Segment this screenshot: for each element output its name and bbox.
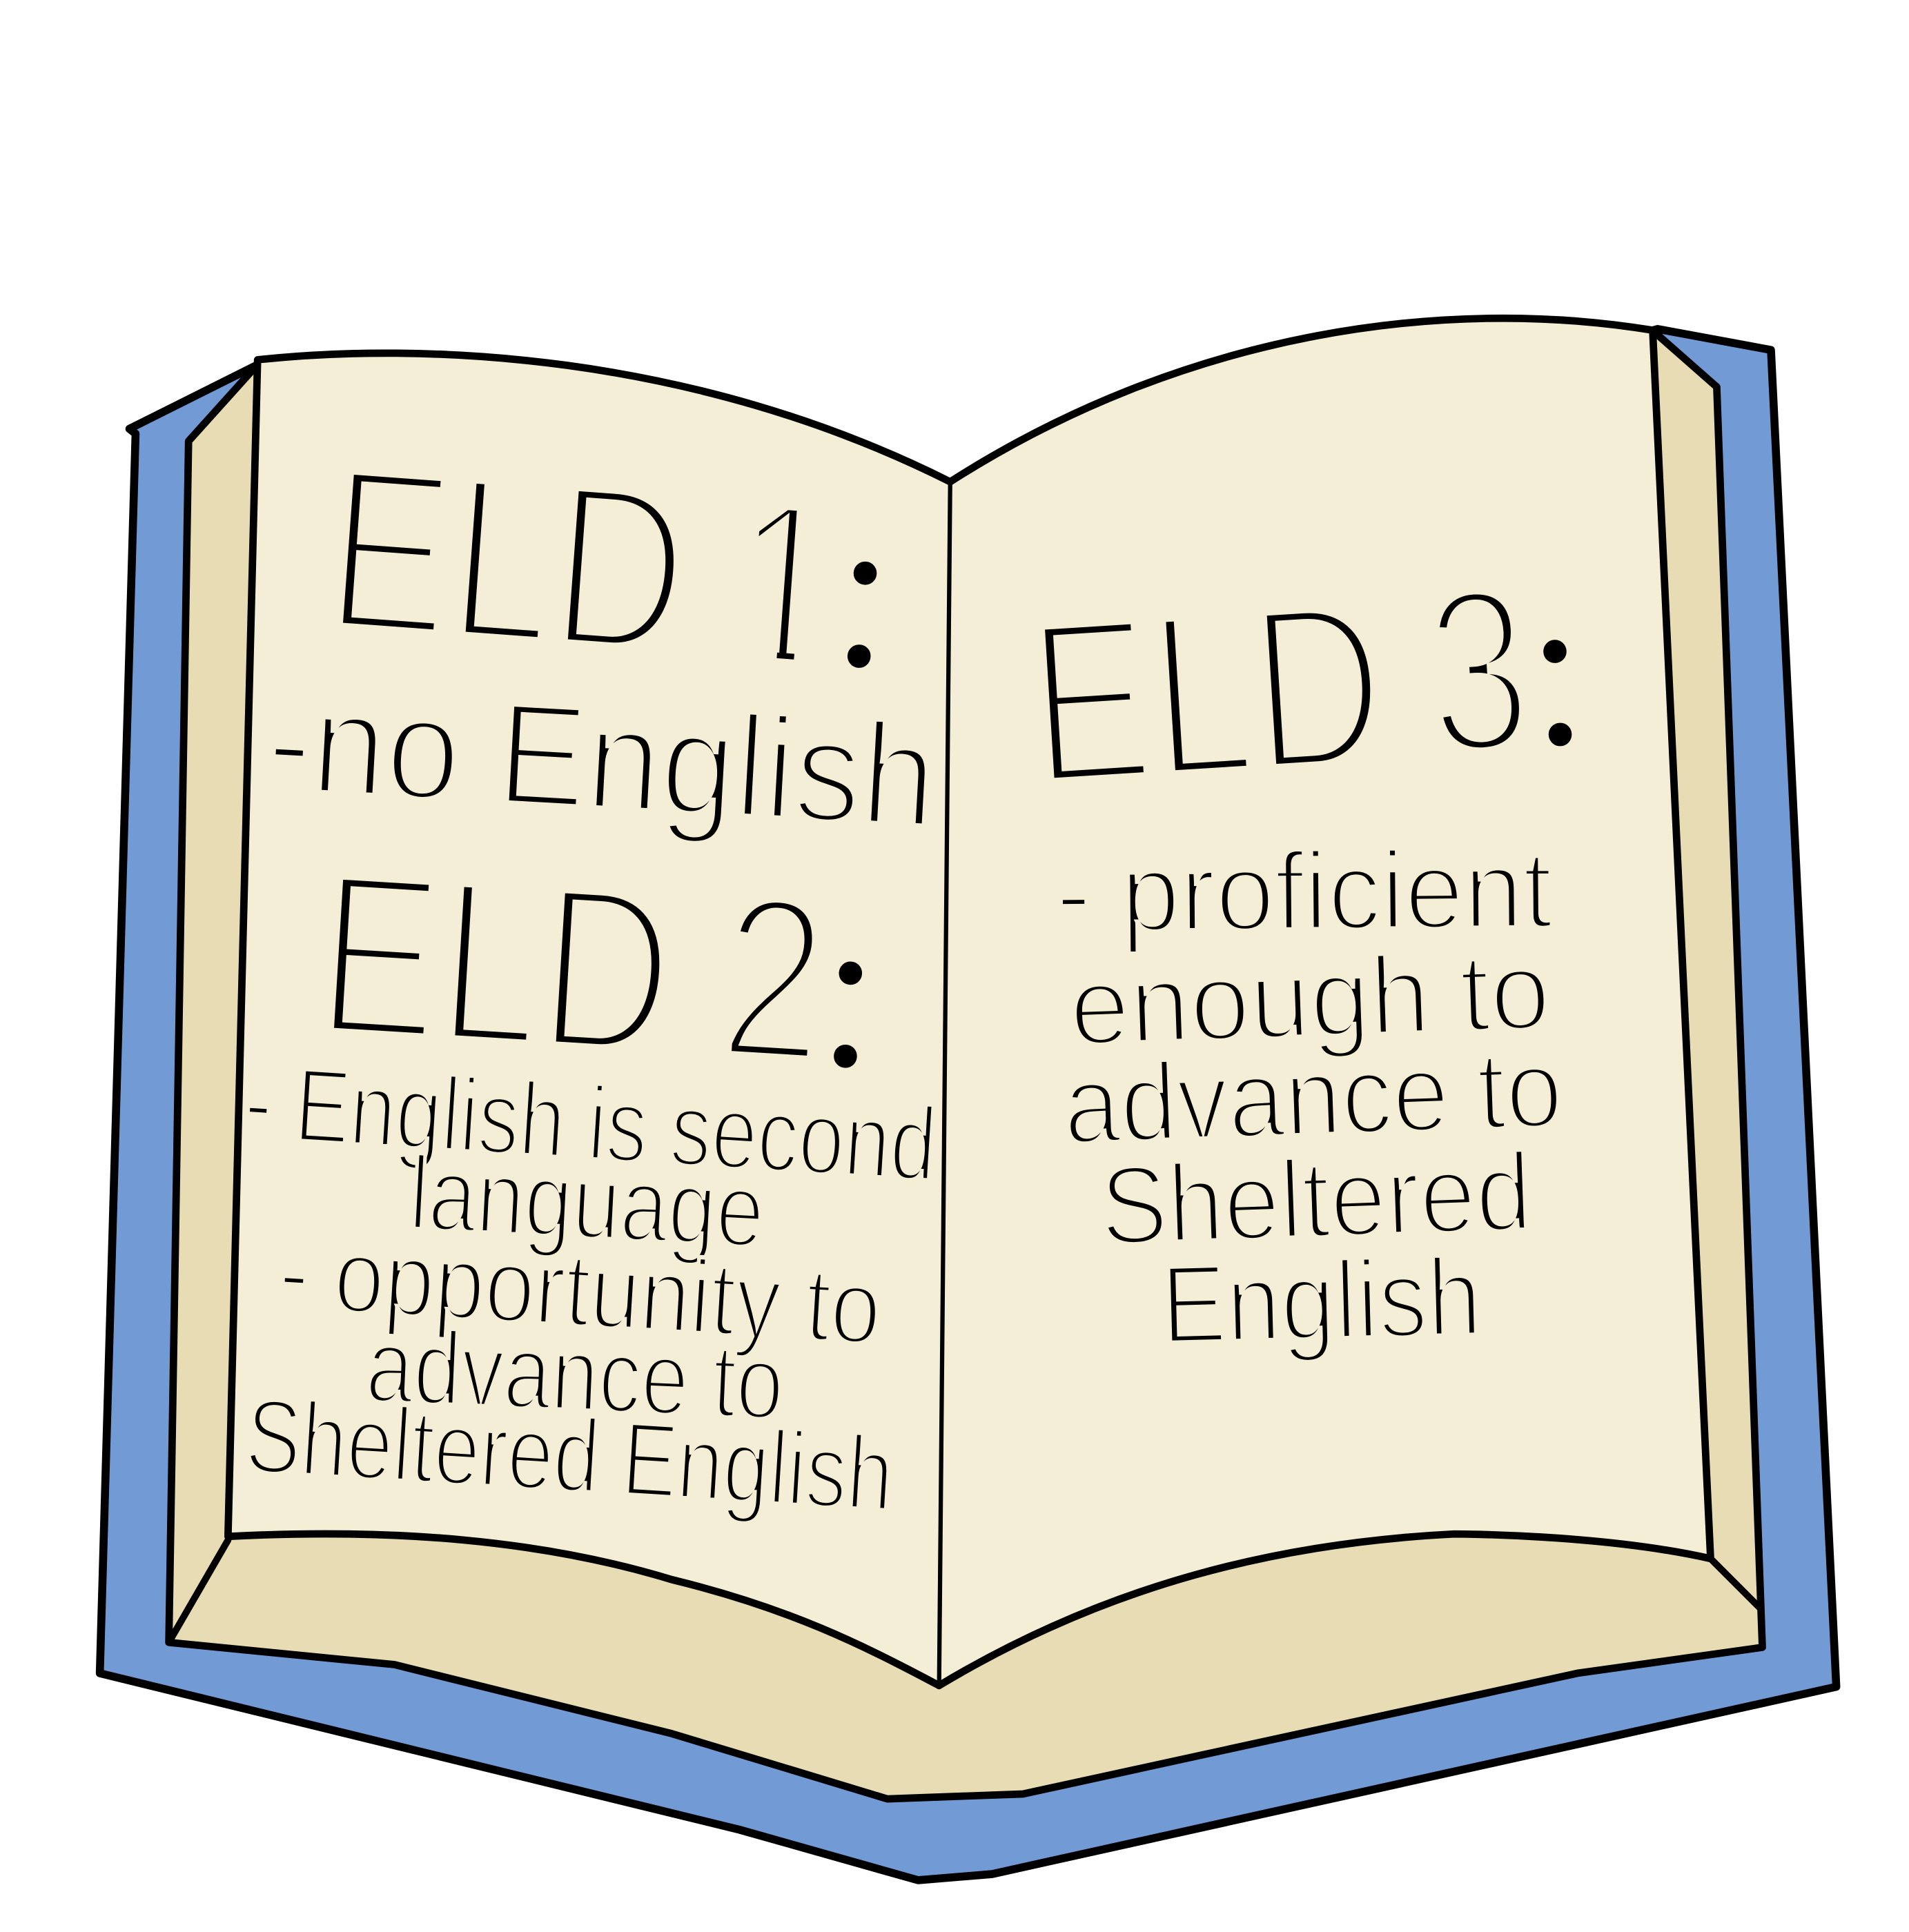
heading: ELD 1: 1 — [723, 450, 846, 718]
heading: ELD 3: ELD — [1022, 552, 1391, 834]
left page — [228, 353, 950, 1686]
heading: ELD 3: 3 — [1420, 537, 1537, 804]
heading: ELD 1: : — [823, 462, 905, 718]
blue book cover — [100, 329, 1837, 1880]
text: language: language — [407, 1135, 767, 1270]
heading: ELD 2: : — [810, 862, 889, 1118]
tan page block — [169, 333, 1763, 1799]
page block corner lines — [169, 1540, 1760, 1642]
book spine line — [939, 482, 950, 1686]
text: English: English — [1159, 1235, 1483, 1367]
text: English is second: - English is second — [242, 1043, 940, 1203]
text: Sheltered English: Sheltered English — [243, 1377, 897, 1533]
left page text — [242, 417, 941, 1533]
text: opportunity to: - opportunity to — [276, 1214, 885, 1367]
heading: ELD 3: : — [1517, 541, 1596, 796]
text: Sheltered: Sheltered — [1098, 1130, 1534, 1269]
text: enough to: enough to — [1068, 929, 1552, 1069]
right page text — [1022, 537, 1596, 1367]
text: advance to: advance to — [364, 1307, 786, 1442]
heading: ELD 1: ELD — [320, 417, 696, 703]
heading: ELD 2: ELD — [311, 822, 681, 1104]
text: advance to: advance to — [1061, 1027, 1565, 1167]
open book illustration — [100, 318, 1837, 1880]
right page — [939, 318, 1711, 1686]
text: no English: -no English — [263, 658, 941, 858]
heading: ELD 2: 2 — [714, 845, 834, 1112]
text: proficient: - proficient — [1055, 828, 1553, 956]
